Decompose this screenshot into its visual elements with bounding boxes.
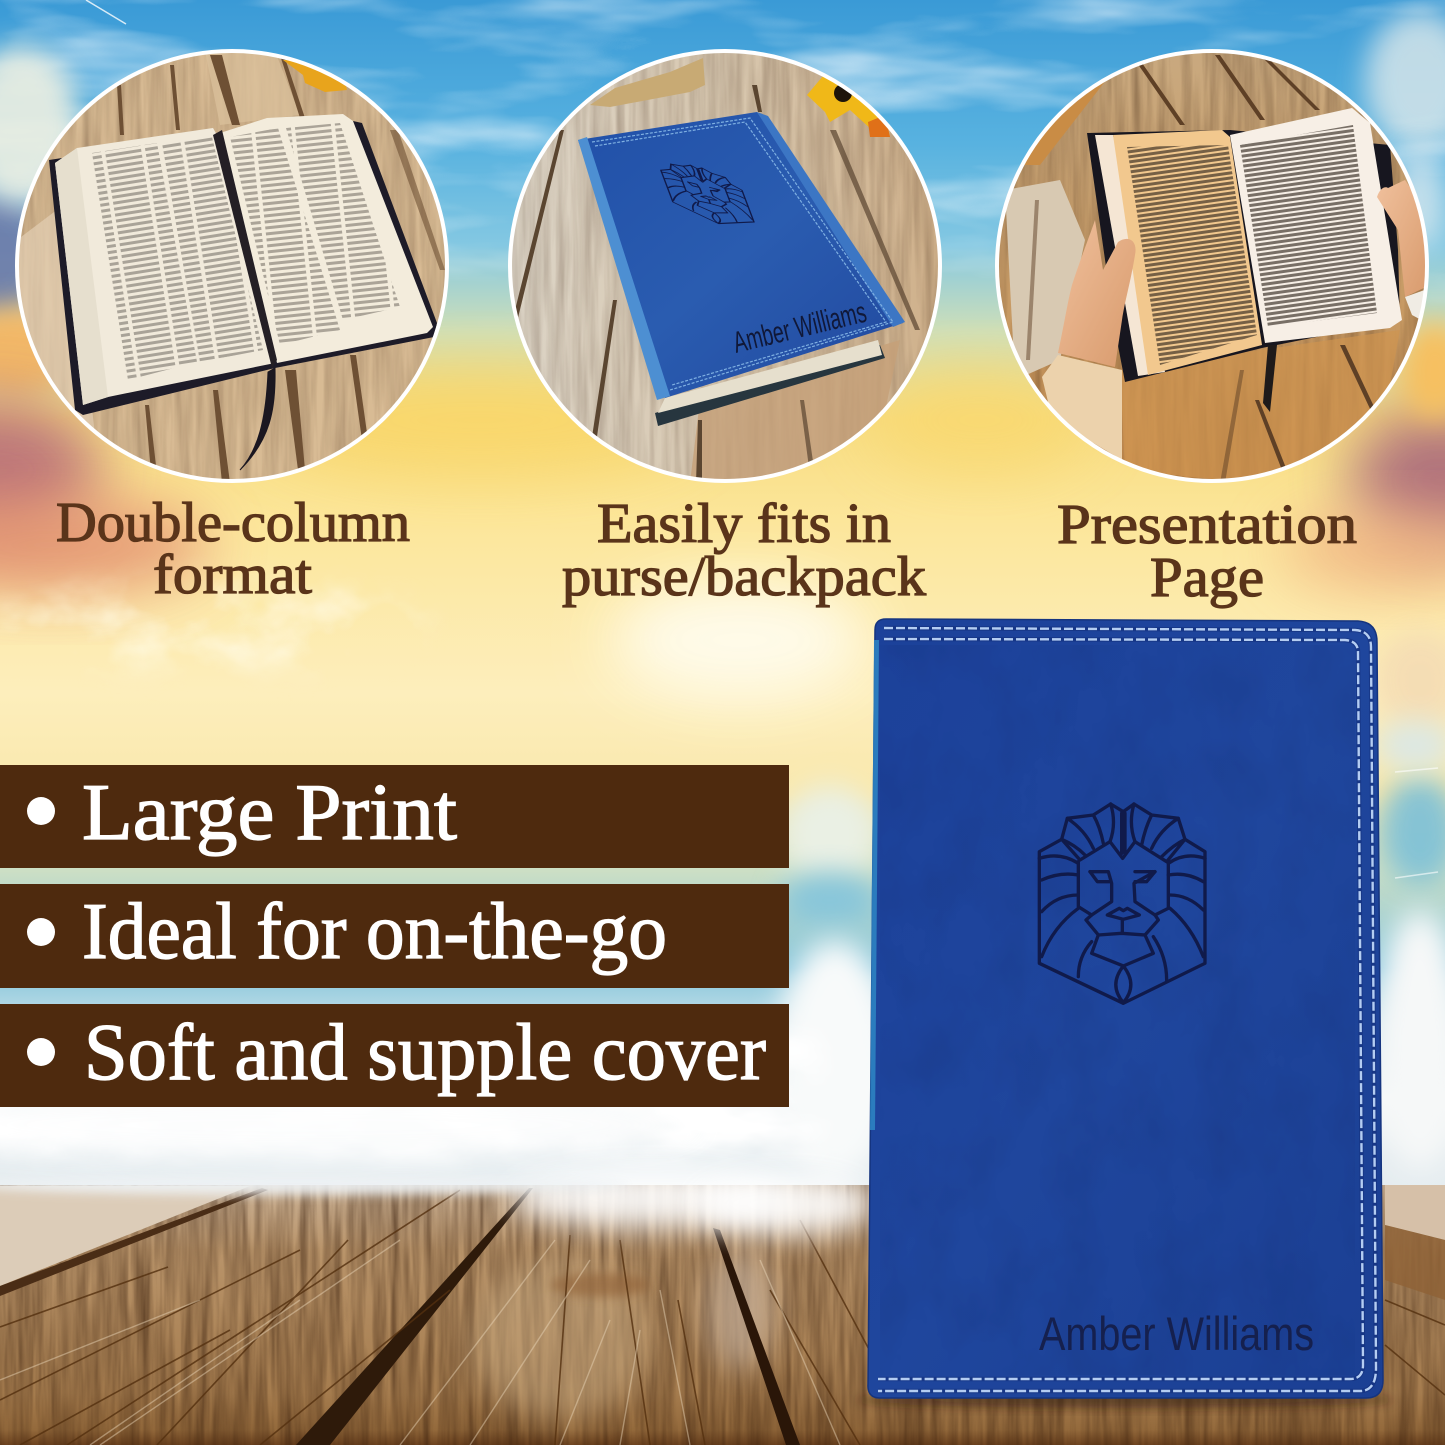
burlap cloth <box>590 58 705 107</box>
spine edge highlight <box>870 640 879 1130</box>
leather texture <box>880 645 1355 1375</box>
small embossed lion <box>660 164 755 224</box>
caption: easily fits: Easily fits in <box>597 493 891 555</box>
open bible <box>49 114 437 470</box>
hands and sweater <box>1042 180 1430 460</box>
sunflower <box>283 60 347 92</box>
caption: double-column format: format <box>153 544 312 606</box>
rustic wood surface <box>997 51 1427 483</box>
caption: presentation page: Presentation <box>1057 494 1357 556</box>
sunflower <box>807 76 890 137</box>
panel: purse sized photo <box>510 51 940 483</box>
caption: presentation page: Page <box>1150 547 1264 609</box>
stitching grooves <box>878 628 1376 1391</box>
panel: presentation page photo <box>997 51 1430 483</box>
closed blue bible <box>578 112 905 426</box>
engraved name: Amber Williams <box>730 296 870 360</box>
wooden table top <box>0 1168 1445 1445</box>
caption: presentation page <box>1057 494 1357 609</box>
caption: easily fits <box>562 493 926 608</box>
wooden surface <box>17 51 447 483</box>
stitching <box>878 628 1376 1391</box>
personalised name: Amber Williams <box>1039 1307 1314 1360</box>
plank gaps <box>0 1188 268 1296</box>
panel: double-column photo <box>17 51 447 483</box>
caption: easily fits: purse/backpack <box>562 546 926 608</box>
feature bar: large print <box>0 765 789 868</box>
embossed lion crest <box>1039 804 1205 1003</box>
whitewashed wood surface <box>510 51 940 483</box>
feature bar: ideal for on-the-go: Ideal for on-the-go <box>82 888 667 976</box>
caption: double-column format <box>56 492 410 606</box>
open bible held in hands <box>1087 108 1402 412</box>
caption: double-column format: Double-column <box>56 492 410 554</box>
feature bar: soft and supple cover: Soft and supple cover <box>84 1009 766 1097</box>
main blue bible cover <box>855 619 1395 1408</box>
feature bar: large print: Large Print <box>82 769 457 857</box>
feature bar: ideal for on-the-go <box>0 884 789 988</box>
